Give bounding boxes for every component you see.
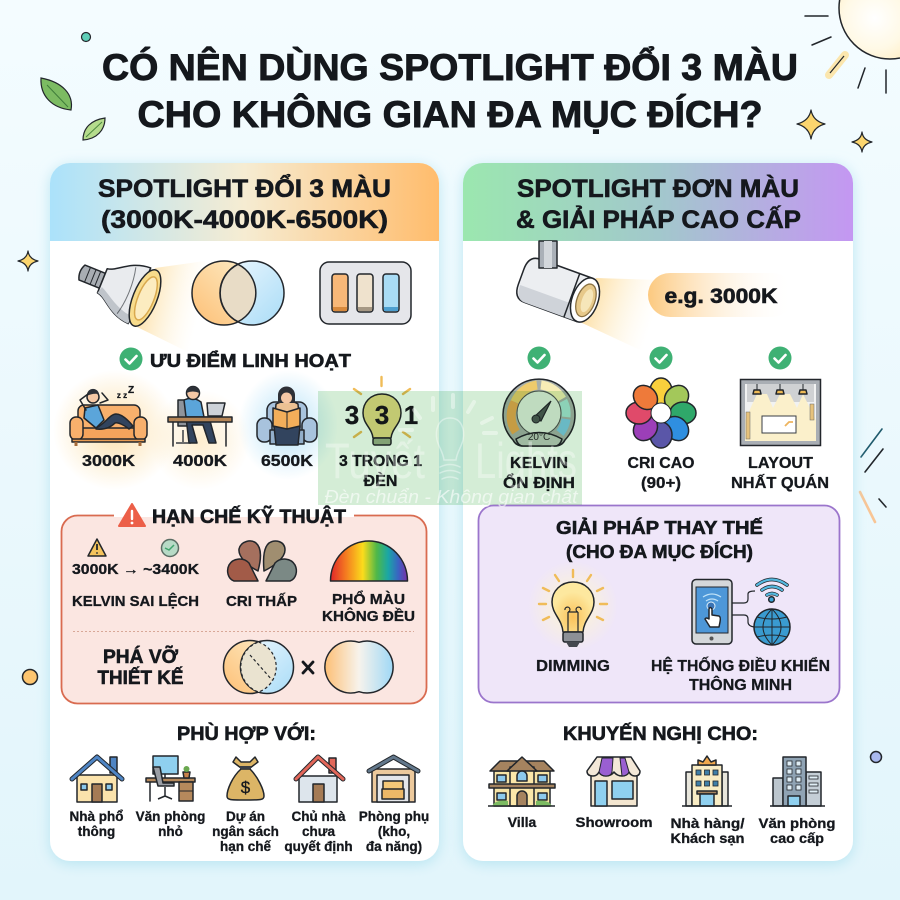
item: phòng phụ: đa năng) (366, 839, 422, 854)
item: nhà phổ thông (70, 757, 124, 839)
heading: khuyến nghị cho: KHUYẾN NGHỊ CHO: (563, 722, 758, 745)
item: dự án ngân sách hạn chế (212, 757, 279, 854)
label: e.g. 3000K (648, 273, 794, 317)
item: villa (488, 757, 555, 830)
item: dimming (528, 561, 618, 675)
item: kelvin ổn định: 20°C (528, 432, 550, 443)
item: 6500K armchair (257, 386, 317, 470)
item: dimming: DIMMING (536, 658, 610, 675)
item: chủ nhà chưa quyết định: Chủ nhà (292, 809, 346, 824)
item: kelvin sai lệch (72, 539, 200, 610)
title (102, 45, 798, 135)
header: left panel: SPOTLIGHT ĐỔI 3 MÀU (98, 173, 391, 203)
icon: check marks (528, 346, 792, 370)
item: 3 trong 1 đèn: 3 TRONG 1 (339, 453, 422, 470)
decoration: sparkles (18, 110, 872, 271)
item: 3000K sofa: Z (128, 385, 134, 396)
item: hệ thống điều khiển thông minh (651, 580, 830, 694)
item: chủ nhà chưa quyết định (284, 757, 353, 854)
item: phòng phụ: Phòng phụ (359, 809, 429, 824)
item: phổ màu không đều: KHÔNG ĐỀU (322, 607, 415, 625)
item: 4000K desk (168, 386, 232, 470)
heading: ưu điểm linh hoạt: ƯU ĐIỂM LINH HOẠT (150, 350, 352, 371)
item: phá vỡ thiết kế (98, 640, 393, 694)
item: kelvin sai lệch: KELVIN SAI LỆCH (72, 592, 199, 610)
decoration: side strokes (860, 429, 886, 522)
item: hệ thống điều khiển thông minh: HỆ THỐNG ĐIỀU KHIỂN (651, 655, 830, 675)
item: nhà hàng khách sạn: Nhà hàng/ (670, 815, 745, 831)
item: văn phòng nhỏ (136, 756, 205, 839)
light beam (580, 278, 660, 350)
item: văn phòng nhỏ: Văn phòng (136, 809, 205, 824)
item: chủ nhà chưa quyết định: chưa (302, 824, 336, 839)
item: 3 trong 1 đèn: 3 (345, 400, 359, 430)
item: nhà phổ thông: thông (78, 824, 115, 839)
header: left panel: (3000K-4000K-6500K) (101, 206, 388, 234)
item: villa: Villa (508, 814, 536, 830)
icon: overlapping colour circles (192, 261, 284, 325)
icon: three-way switch (320, 262, 411, 324)
header: right panel: SPOTLIGHT ĐƠN MÀU (517, 174, 799, 203)
item: kelvin ổn định (503, 379, 575, 492)
watermark: Tuyết Lights: Lights (475, 433, 577, 489)
heading: giải pháp thay thế: GIẢI PHÁP THAY THẾ (556, 517, 763, 538)
icon: multi-colour bulb (69, 244, 167, 330)
watermark: Tuyết Lights (318, 391, 582, 507)
title: CÓ NÊN DÙNG SPOTLIGHT ĐỔI 3 MÀU (102, 45, 798, 88)
item: phá vỡ thiết kế: PHÁ VỠ (103, 644, 178, 668)
label: e.g. 3000K: e.g. 3000K (664, 285, 778, 308)
item: cri cao: (90+) (641, 475, 681, 492)
item: kelvin ổn định: ỔN ĐỊNH (503, 473, 575, 492)
header: right panel (463, 163, 853, 241)
item: 3 trong 1 đèn: 3 (375, 400, 389, 430)
title: CHO KHÔNG GIAN ĐA MỤC ĐÍCH? (138, 93, 762, 135)
item: cri thấp (226, 541, 297, 610)
item: 3000K sofa: z z (117, 391, 127, 400)
item: showroom (576, 757, 652, 830)
decoration: leaves and dots (22, 32, 882, 762)
item: dự án ngân sách hạn chế: hạn chế (220, 839, 271, 854)
light beam (135, 261, 205, 352)
item: phòng phụ: (kho, (378, 824, 410, 839)
item: layout nhất quán: NHẤT QUÁN (731, 473, 829, 492)
item: phổ màu không đều: PHỔ MÀU (332, 590, 405, 608)
item: kelvin sai lệch: 3000K → ~3400K (72, 562, 200, 578)
heading: hạn chế kỹ thuật: HẠN CHẾ KỸ THUẬT (152, 506, 346, 528)
panel: spotlight đổi 3 màu (50, 163, 439, 861)
heading: giải pháp thay thế (556, 517, 763, 562)
heading: phù hợp với: PHÙ HỢP VỚI: (177, 721, 316, 745)
header: right panel: & GIẢI PHÁP CAO CẤP (516, 204, 801, 234)
item: văn phòng cao cấp: Văn phòng (758, 815, 836, 831)
panel: giải pháp thay thế (478, 506, 840, 702)
item: 3 trong 1 đèn: ĐÈN (364, 473, 398, 490)
watermark: Tuyết Lights: Tuyết (325, 433, 425, 489)
item: phổ màu không đều (322, 541, 415, 625)
item: 3 trong 1 đèn (339, 377, 422, 490)
item: dự án ngân sách hạn chế: $ (241, 778, 251, 797)
item: 3000K sofa: 3000K (82, 453, 136, 470)
panel: hạn chế kỹ thuật (62, 504, 426, 704)
item: cri thấp: CRI THẤP (226, 593, 297, 610)
item: kelvin ổn định: KELVIN (510, 455, 568, 472)
item: văn phòng cao cấp: cao cấp (770, 830, 824, 846)
icon: track spotlight (513, 241, 605, 326)
item: chủ nhà chưa quyết định: quyết định (284, 839, 353, 854)
item: nhà phổ thông: Nhà phổ (70, 809, 124, 824)
item: nhà hàng khách sạn: Khách sạn (670, 830, 744, 846)
item: văn phòng cao cấp (758, 757, 836, 846)
item: hệ thống điều khiển thông minh: THÔNG MINH (689, 675, 792, 694)
heading: giải pháp thay thế: (CHO ĐA MỤC ĐÍCH) (566, 541, 753, 562)
item: layout nhất quán (731, 380, 829, 492)
watermark: Tuyết Lights: Đèn chuẩn - Không gian chất (324, 487, 579, 507)
item: 6500K armchair: 6500K (261, 453, 314, 470)
item: 3000K sofa (70, 385, 147, 470)
panel: spotlight đơn màu (463, 163, 853, 861)
item: dự án ngân sách hạn chế: ngân sách (212, 824, 279, 839)
item: dự án ngân sách hạn chế: Dự án (226, 809, 265, 824)
item: 4000K desk: 4000K (173, 453, 228, 470)
item: phòng phụ (359, 757, 429, 854)
item: layout nhất quán: LAYOUT (748, 455, 813, 472)
header: left panel (50, 163, 439, 241)
decoration: sun (805, 0, 900, 93)
glow: warm and cool (53, 370, 338, 490)
item: showroom: Showroom (576, 814, 652, 830)
item: cri cao: CRI CAO (628, 455, 694, 472)
item: cri cao (626, 378, 696, 492)
item: nhà hàng khách sạn (670, 756, 745, 846)
item: 3 trong 1 đèn: 1 (404, 400, 418, 430)
item: văn phòng nhỏ: nhỏ (158, 824, 183, 839)
item: phá vỡ thiết kế: THIẾT KẾ (98, 666, 184, 689)
